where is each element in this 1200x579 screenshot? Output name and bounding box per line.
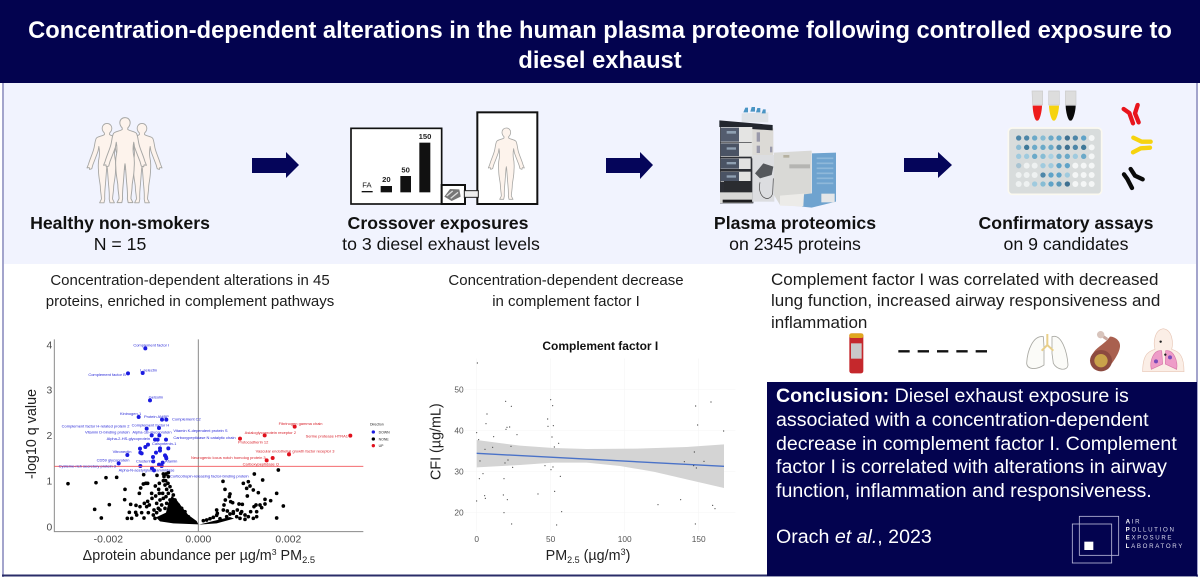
chart: scatter axis titles: PM <box>546 548 567 564</box>
heading: correlation finding: lung function, increased airway responsiveness and <box>771 291 1160 310</box>
text: healthy non-smokers: N = 15 <box>94 234 146 254</box>
text: conclusion <box>776 385 1177 502</box>
text: conclusion: factor I is correlated with alterations in airway <box>776 456 1167 478</box>
chart: complement factor I scatter <box>428 339 735 565</box>
icon: diesel exposure chamber: 50 <box>401 165 410 174</box>
chart: volcano axis titles: -log10 q value <box>24 389 40 479</box>
text: plasma proteomics: Plasma proteomics <box>714 213 876 233</box>
text: healthy non-smokers <box>30 213 210 254</box>
chart: scatter ticks: 40 <box>454 426 464 436</box>
dashed correlation line <box>898 348 991 355</box>
chart: decreased protein labels: Vitronectin <box>113 449 131 454</box>
logo: air pollution exposure laboratory: AIR <box>1126 518 1141 525</box>
chart: scatter axis titles <box>428 403 630 565</box>
legend: direction: UP <box>379 444 384 448</box>
title banner <box>0 0 1200 83</box>
chart: decreased protein labels: Complement C2 <box>172 416 202 421</box>
chart: decreased protein labels: Alpha-N-acetylglucosaminidase <box>119 468 175 473</box>
text: healthy non-smokers: Healthy non-smokers <box>30 213 210 233</box>
text: crossover exposures <box>342 213 540 254</box>
arrow: step 3 to 4 <box>904 152 952 178</box>
legend: direction: NONE <box>379 437 389 441</box>
chart: decreased protein labels: Complement factor B <box>88 372 126 377</box>
chart: scatter ticks: 20 <box>454 508 464 518</box>
text: crossover exposures: to 3 diesel exhaust levels <box>342 234 540 254</box>
chart: scatter axis titles: (µg/m <box>580 548 621 564</box>
chart: scatter title: Complement factor I <box>542 339 658 353</box>
icon row: correlation with lung outcomes <box>849 329 1184 373</box>
chart: scatter ticks: 150 <box>692 534 706 544</box>
chart: decreased protein labels: Afamin <box>165 459 177 464</box>
chart: volcano axis ticks: 4 <box>46 341 52 352</box>
chart: confidence band <box>477 440 724 488</box>
chart: decreased protein labels: Carboxypeptidase N catalytic chain <box>173 435 236 440</box>
chart: scatter axis titles: 2.5 <box>567 555 580 565</box>
text: conclusion: associated with a concentration-dependent <box>776 409 1149 431</box>
chart: volcano axis ticks: -0.002 <box>94 535 123 546</box>
chart: volcano plot <box>24 339 390 565</box>
chart: significantly increased proteins <box>240 427 350 460</box>
heading: complement factor I finding: in complement factor I <box>492 293 640 310</box>
chart: volcano axis ticks: 0.000 <box>185 535 212 546</box>
icon: diesel exposure chamber: 150 <box>419 132 431 141</box>
chart: decreased protein labels: Vitamin D-binding protein <box>85 430 130 435</box>
chart: scatter ticks: 0 <box>474 534 479 544</box>
chart: scatter ticks: 30 <box>454 467 464 477</box>
icon: assay plate, tubes and antibodies <box>1008 91 1151 194</box>
chart: decreased protein labels: Clusterin <box>136 458 152 463</box>
chart: scatter points <box>477 363 724 525</box>
icon: lungs <box>1027 334 1068 369</box>
logo: air pollution exposure laboratory <box>1072 516 1184 563</box>
title banner: Concentration-dependent alterations in the human plasma proteome following controlled exposure to <box>28 18 1172 44</box>
heading: complement factor I finding: Concentration-dependent decrease <box>448 272 684 289</box>
chart: decreased protein labels: Protein AMBP <box>144 414 169 419</box>
text: crossover exposures: Crossover exposures <box>348 213 529 233</box>
text: confirmatory assays <box>979 213 1154 254</box>
icon: airway <box>1090 331 1120 371</box>
chart: decreased protein labels: Complement factor H <box>132 422 169 427</box>
icon: three human figures <box>87 118 162 203</box>
chart: decreased protein labels: Complement factor H-related protein 2 <box>62 423 130 428</box>
legend: direction <box>370 423 390 448</box>
heading: complement factor I finding <box>448 272 684 310</box>
chart: decreased protein labels: Cysteine-rich secretory protein 3 <box>59 464 117 469</box>
chart: volcano axis ticks: 3 <box>46 385 52 396</box>
chart: volcano axis ticks <box>46 341 302 546</box>
chart: decreased protein labels: Alpha-1B-glycoprotein <box>132 430 172 435</box>
chart: decreased protein labels: Gelsolin <box>149 395 163 400</box>
icon: blood tube <box>849 333 863 373</box>
chart: increased protein labels: Vascular endothelial growth factor receptor 3 <box>256 449 335 454</box>
text: confirmatory assays: Confirmatory assays <box>979 213 1154 233</box>
chart: increased protein labels: Serine protease HTRA1 <box>306 434 349 439</box>
chart: decreased protein labels: Alpha-2-HS-glycoprotein <box>107 436 150 441</box>
chart: scatter axis titles: CFI (µg/mL) <box>428 403 444 480</box>
chart: scatter ticks: 50 <box>454 384 464 394</box>
chart: volcano axis titles: PM <box>277 548 302 564</box>
legend: direction: Direction <box>370 423 384 427</box>
panel: conclusion <box>767 382 1197 576</box>
icon: diesel exposure chamber <box>351 112 537 204</box>
arrow: step 2 to 3 <box>606 152 653 179</box>
chart: volcano axis ticks: 2 <box>46 431 52 442</box>
legend: direction: DOWN <box>379 430 390 434</box>
heading: correlation finding: Complement factor I was correlated with decreased <box>771 270 1158 289</box>
text: citation: Orach et al., 2023 <box>776 526 932 548</box>
chart: increased protein labels: Carboxypeptidase Q <box>243 462 279 467</box>
chart: increased protein labels: Neurogenic locus notch homolog protein 3 <box>191 455 266 460</box>
chart: increased protein labels: Protocadherin 12 <box>238 440 269 445</box>
text: conclusion: decrease in complement factor I. Complement <box>776 433 1177 455</box>
icon: mass spectrometer <box>719 107 836 208</box>
chart: volcano axis ticks: 1 <box>46 476 52 487</box>
chart: scatter ticks: 50 <box>546 534 556 544</box>
chart: scatter axis titles: ) <box>626 548 630 564</box>
chart: volcano axis titles <box>24 389 315 565</box>
chart: decreased protein labels: Calsyntenin-1 <box>152 441 177 446</box>
icon: diesel exposure chamber: FA <box>362 181 373 190</box>
chart: volcano axis titles: 2.5 <box>302 555 315 565</box>
text: plasma proteomics: on 2345 proteins <box>729 234 861 254</box>
text: confirmatory assays: on 9 candidates <box>1004 234 1129 254</box>
icon: antibodies <box>1124 105 1151 188</box>
chart: decreased protein labels: Kininogen-1 <box>120 411 142 416</box>
panel: study workflow <box>4 83 1196 264</box>
chart: volcano axis titles: 3 <box>272 547 277 557</box>
chart: scatter ticks <box>454 384 706 544</box>
chart: significantly decreased proteins <box>119 348 168 470</box>
logo: air pollution exposure laboratory: POLLUTION <box>1126 527 1176 534</box>
heading: correlation finding: inflammation <box>771 313 867 332</box>
logo: air pollution exposure laboratory: EXPOSURE <box>1126 535 1173 542</box>
icon: sample tubes <box>1032 91 1076 121</box>
text: conclusion: Conclusion: Diesel exhaust exposure is <box>776 385 1129 407</box>
heading: volcano plot finding: Concentration-dependent alterations in 45 <box>50 272 330 289</box>
heading: volcano plot finding: proteins, enriched in complement pathways <box>46 293 334 310</box>
chart: increased protein labels <box>191 421 349 467</box>
chart: decreased protein labels: Vitamin K-dependent protein S <box>173 428 228 433</box>
arrow: step 1 to 2 <box>252 152 299 178</box>
heading: correlation finding <box>771 270 1160 332</box>
chart: volcano axis titles: Δprotein abundance per µg/m <box>83 548 272 564</box>
icon: well plate <box>1008 128 1102 194</box>
chart: volcano axis ticks: 0 <box>46 522 52 533</box>
chart: regression line <box>477 453 724 466</box>
chart: decreased protein labels: L-selectin <box>140 367 157 372</box>
title banner: diesel exhaust <box>518 48 682 74</box>
chart: unchanged proteins <box>68 468 283 525</box>
text: conclusion: function, inflammation and responsiveness. <box>776 480 1152 502</box>
chart: decreased protein labels <box>59 343 249 479</box>
chart: decreased protein labels: CD59 glycoprotein <box>97 457 129 462</box>
chart: increased protein labels: Asialoglycoprotein receptor 2 <box>245 430 297 435</box>
chart: decreased protein labels: Complement factor I <box>133 343 169 348</box>
chart: scatter ticks: 100 <box>618 534 632 544</box>
heading: volcano plot finding <box>46 272 334 310</box>
icon: respiratory system <box>1143 329 1184 372</box>
text: plasma proteomics <box>714 213 876 254</box>
chart: scatter axis titles: 3 <box>621 547 626 557</box>
chart: volcano axis ticks: 0.002 <box>275 535 302 546</box>
chart: decreased protein labels: Corticotropin-releasing factor-binding protein <box>170 474 249 479</box>
logo: air pollution exposure laboratory: LABORATORY <box>1126 543 1184 550</box>
icon: diesel exposure chamber: 20 <box>382 175 391 184</box>
chart: increased protein labels: Fibrinogen gamma chain <box>279 421 323 426</box>
